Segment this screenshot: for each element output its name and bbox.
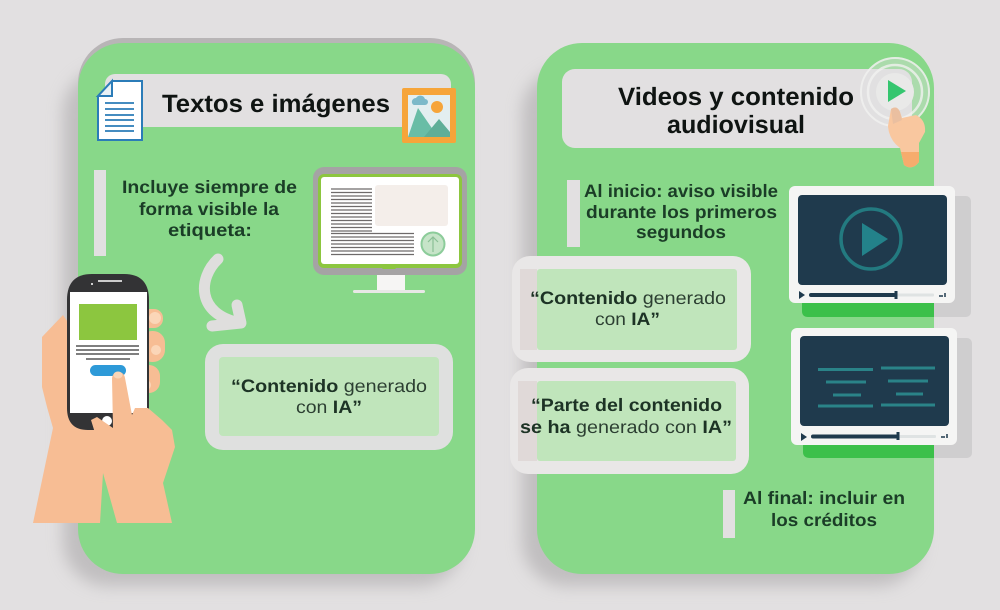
callout: parte del contenido: se ha generado con IA”: [520, 417, 732, 437]
icon: picture: [402, 88, 456, 143]
callout: contenido generado: con IA”: [296, 397, 362, 417]
heading: videos y contenido audiovisual: [618, 83, 854, 139]
accent bar: [567, 180, 580, 247]
heading: videos y contenido audiovisual: Videos y contenido: [618, 83, 854, 111]
accent bar: [723, 490, 735, 538]
text: al final: [743, 488, 905, 530]
text: instruction: Incluye siempre de: [122, 177, 297, 197]
callout: parte del contenido: “Parte del contenido: [531, 395, 722, 415]
fingers behind phone: [138, 309, 165, 393]
heading: textos e imágenes: Textos e imágenes: [162, 90, 390, 118]
heading: videos y contenido audiovisual: audiovisual: [667, 111, 805, 139]
panel: textos e imágenes: [63, 38, 475, 586]
header bar: videos: [562, 69, 912, 148]
callout: parte del contenido: [510, 368, 749, 474]
callout: contenido generado: “Contenido generado: [530, 288, 726, 308]
phone: [67, 274, 149, 430]
text: al final: Al final: incluir en: [743, 488, 905, 508]
text: al final: los créditos: [771, 510, 877, 530]
arrow: [204, 259, 241, 326]
text: instruction: [122, 177, 297, 240]
panel: videos y contenido audiovisual: [510, 43, 972, 586]
callout: contenido generado: “Contenido generado: [231, 376, 427, 396]
callout: contenido generado: con IA”: [595, 309, 660, 329]
header bar: textos e imágenes: [105, 74, 451, 127]
callout: contenido generado: [512, 256, 751, 362]
illustration: hands holding phone: [33, 274, 175, 523]
text: instruction: etiqueta:: [168, 220, 252, 240]
text: instruction: forma visible la: [139, 199, 280, 219]
video player: subtitles: [791, 328, 972, 458]
icon: play button with finger: [860, 57, 930, 167]
icon: document: [98, 81, 142, 140]
text: al inicio: [584, 181, 778, 242]
text: al inicio: durante los primeros: [586, 202, 777, 222]
text: al inicio: Al inicio: aviso visible: [584, 181, 778, 201]
callout: contenido generado: [205, 344, 453, 450]
icon: monitor: [313, 167, 467, 293]
text: al inicio: segundos: [636, 222, 726, 242]
front hand with finger: [91, 372, 175, 523]
accent bar: [94, 170, 106, 256]
back hand and wrist: [33, 315, 105, 523]
video player: play: [789, 186, 971, 317]
